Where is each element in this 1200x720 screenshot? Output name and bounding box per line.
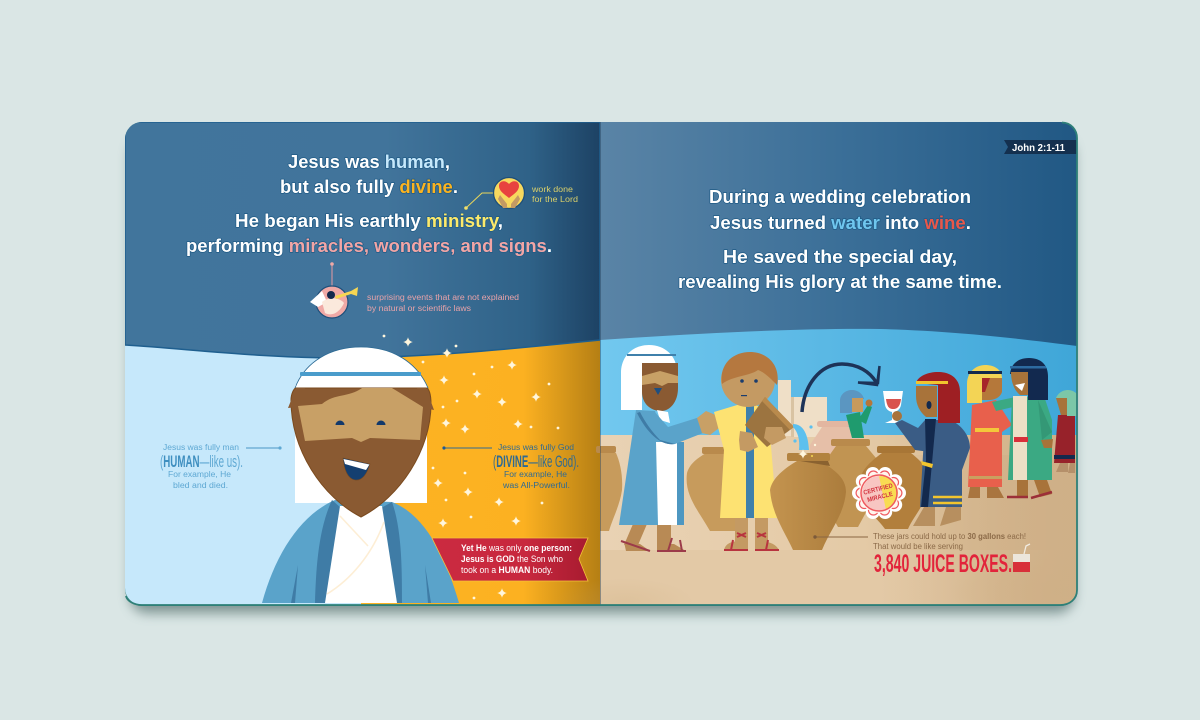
reference tag: John 2:1-11 xyxy=(1004,140,1077,154)
ground xyxy=(600,435,1077,605)
hair flares xyxy=(288,388,434,410)
water pour xyxy=(793,424,809,450)
arm to goblet xyxy=(895,420,930,452)
ribbon callout: one person: Yet He was only one person: xyxy=(461,543,572,553)
heading: human and divine: but also fully divine. xyxy=(280,177,458,197)
leader line: jars xyxy=(813,535,868,539)
legs xyxy=(735,518,748,548)
yellow centre xyxy=(864,476,898,510)
face xyxy=(982,378,1002,400)
feet xyxy=(968,487,1004,498)
callout: fully God: was All-Powerful. xyxy=(502,481,570,490)
background buildings xyxy=(778,380,827,437)
sandals xyxy=(1007,492,1052,498)
robe xyxy=(920,420,970,507)
face skin xyxy=(642,371,678,386)
navy hair xyxy=(1010,358,1048,400)
skin xyxy=(298,388,423,442)
text: jar capacity: That would be like serving xyxy=(873,542,963,551)
red belt xyxy=(1014,437,1028,442)
ribbon callout: one person: Jesus is GOD the Son who xyxy=(461,554,563,564)
definition: miracles xyxy=(367,293,519,313)
seal wording: MIRACLE xyxy=(867,491,894,504)
hand xyxy=(697,411,719,435)
divine gold side xyxy=(361,330,600,605)
callout: fully man: (HUMAN—like us). xyxy=(160,452,243,471)
legs xyxy=(913,507,961,526)
heading: human and divine: He began His earthly ministry, xyxy=(235,211,503,231)
heading: wedding: Jesus turned water into wine. xyxy=(710,213,971,233)
turban dome xyxy=(295,347,428,388)
leader line: miracles xyxy=(330,262,334,286)
definition: miracles: surprising events that are not explained xyxy=(367,293,519,302)
dark blue header field xyxy=(125,122,600,358)
callout: fully God xyxy=(442,443,579,490)
book pages xyxy=(125,122,1076,604)
hem stripes xyxy=(933,497,962,503)
jar: large front xyxy=(770,424,846,550)
dark blue header field xyxy=(600,122,1077,346)
beard and face xyxy=(642,363,678,411)
cream stripe xyxy=(1013,396,1027,480)
back head cloth xyxy=(295,385,427,503)
red scalloped ring xyxy=(856,470,902,516)
heading: human and divine: Jesus was human, xyxy=(288,152,450,172)
stars on gold xyxy=(422,360,559,599)
arm xyxy=(637,411,703,444)
water sparkles xyxy=(793,425,816,459)
goblet of wine xyxy=(883,391,903,423)
callout: fully man: bled and died. xyxy=(173,481,228,490)
foreground sand xyxy=(601,550,711,604)
character: far right guest xyxy=(1054,390,1077,473)
jar behind boy xyxy=(687,453,748,531)
inner ring xyxy=(861,475,897,511)
navy band xyxy=(968,371,1002,374)
mouth xyxy=(654,388,662,395)
heading: wedding xyxy=(678,187,1002,292)
face xyxy=(740,379,758,396)
text: jar capacity xyxy=(873,532,1026,551)
character: servant boy with jug xyxy=(714,352,794,550)
tunic collar lines xyxy=(327,516,384,594)
callout: fully man xyxy=(160,443,282,490)
face xyxy=(916,386,937,417)
jars: back row xyxy=(596,421,930,531)
dark fold xyxy=(921,419,936,507)
head xyxy=(721,353,775,407)
white tunic xyxy=(325,506,397,603)
headband xyxy=(627,354,676,356)
robe inner folds xyxy=(291,500,431,603)
feet xyxy=(624,542,686,551)
yellow head cloth xyxy=(967,365,1002,403)
heading: wedding: revealing His glory at the same time. xyxy=(678,272,1002,292)
definition: ministry xyxy=(532,186,578,202)
legs xyxy=(1017,480,1052,497)
belt xyxy=(921,461,933,468)
white scalloped edge xyxy=(852,467,906,519)
white tunic stripe xyxy=(656,442,677,525)
callout: fully man: Jesus was fully man xyxy=(163,443,239,452)
sandals xyxy=(621,538,686,551)
coral robe xyxy=(968,400,1012,487)
hands xyxy=(739,427,786,452)
character: child waving xyxy=(840,390,872,438)
icon: hands holding heart xyxy=(494,178,524,208)
head cloth xyxy=(621,345,677,410)
panel: left page xyxy=(125,122,600,605)
tipped jug xyxy=(745,397,794,447)
icon: juice box xyxy=(1013,544,1030,572)
ribbon callout: one person: took on a HUMAN body. xyxy=(461,565,553,575)
character: large Jesus portrait xyxy=(262,347,459,603)
arm around woman xyxy=(992,396,1022,411)
red hair xyxy=(982,378,990,392)
robe xyxy=(262,500,459,603)
ribbon callout: one person xyxy=(432,538,588,581)
white scalloped inset xyxy=(857,472,901,514)
arrow: water to wine xyxy=(802,364,880,412)
smile xyxy=(1015,383,1025,391)
hand xyxy=(1041,439,1053,448)
yellow robe xyxy=(714,402,777,518)
beard and face xyxy=(291,388,431,517)
pink sweep xyxy=(862,476,886,512)
definition: miracles: by natural or scientific laws xyxy=(367,304,471,313)
green robe xyxy=(1008,396,1052,480)
heading: human and divine xyxy=(186,152,552,256)
sash xyxy=(975,428,999,432)
teeth xyxy=(344,459,370,470)
character: woman in coral xyxy=(967,365,1012,498)
mouth xyxy=(343,458,370,480)
pink jar xyxy=(810,427,862,460)
heading: human and divine: performing miracles, wonders, and signs . xyxy=(186,236,552,256)
heading: wedding: He saved the special day, xyxy=(723,247,957,267)
heading: wedding: During a wedding celebration xyxy=(709,187,971,207)
callout: fully man: For example, He xyxy=(168,470,232,479)
band xyxy=(916,381,948,384)
hand on goblet xyxy=(892,411,902,421)
legs xyxy=(624,524,671,546)
sand shading xyxy=(582,550,1076,604)
stars above the wave xyxy=(383,335,457,358)
seal wording xyxy=(863,483,896,504)
character: Jesus xyxy=(619,345,719,551)
text: jar capacity: These jars could hold up to 30 gallons each! xyxy=(873,532,1026,541)
icon: angel with trumpet xyxy=(310,286,358,318)
robe xyxy=(619,410,684,525)
panel: right page xyxy=(582,122,1076,604)
sandals xyxy=(724,533,779,550)
character: man in green xyxy=(992,358,1053,498)
callout: fully God: For example, He xyxy=(504,470,568,479)
character: man in navy robe xyxy=(892,372,970,526)
headband xyxy=(300,372,421,376)
jar two xyxy=(820,446,886,527)
hair cloth xyxy=(916,372,960,423)
stat: juice boxes: 3,840 JUICE BOXES. xyxy=(874,550,1012,578)
callout: fully God: Jesus was fully God xyxy=(498,443,574,452)
infographic: open book spread xyxy=(122,122,1082,621)
callout: fully God: (DIVINE—like God). xyxy=(493,452,579,471)
teal right book edge xyxy=(126,122,1077,605)
reference tag: John 2:1-11: John 2:1-11 xyxy=(1012,143,1065,154)
definition: ministry: for the Lord xyxy=(532,195,578,204)
blue stripe xyxy=(746,406,754,518)
feet xyxy=(724,541,779,550)
hair xyxy=(722,352,778,385)
seal: certified miracle xyxy=(852,467,906,519)
book edge xyxy=(125,122,1077,606)
jar three xyxy=(858,453,930,529)
human sky side xyxy=(125,330,365,605)
definition: ministry: work done xyxy=(531,185,574,194)
jar far left xyxy=(600,453,622,531)
band xyxy=(1010,366,1046,368)
book spine xyxy=(600,122,601,605)
mouth xyxy=(926,401,932,409)
leader line: ministry xyxy=(464,193,494,210)
eyes xyxy=(336,420,386,425)
book drop shadow xyxy=(130,138,1074,613)
seal wording: CERTIFIED xyxy=(863,483,894,497)
face xyxy=(1011,372,1028,395)
sky xyxy=(600,325,1077,440)
